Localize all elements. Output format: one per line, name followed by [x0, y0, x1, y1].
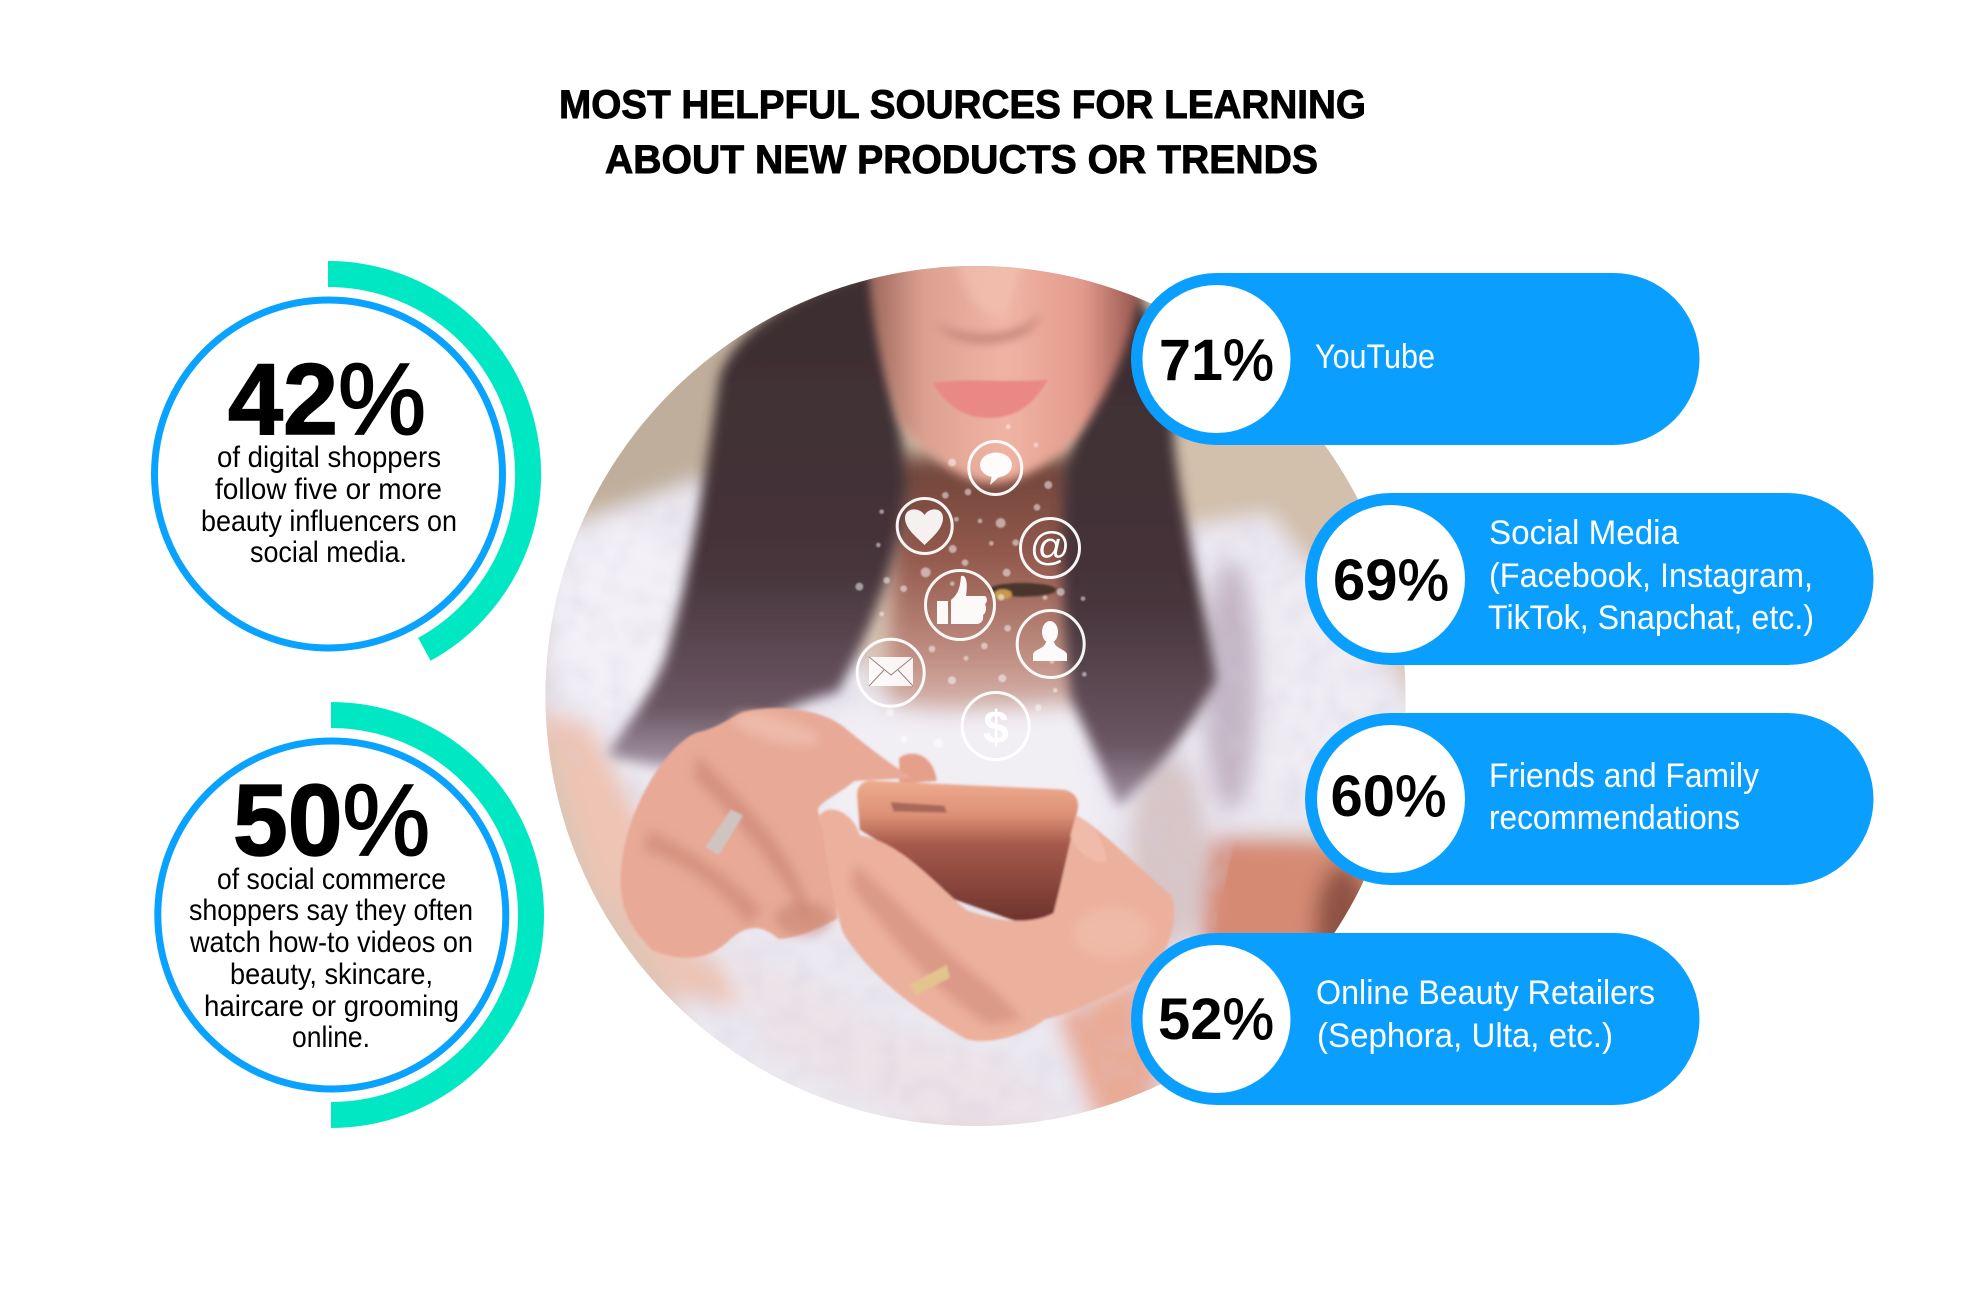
pill: Online Beauty Retailers 52%: (Sephora, Ulta, etc.) [1317, 1017, 1613, 1055]
42% description [201, 441, 457, 569]
infographic canvas [151, 90, 1874, 1128]
title: MOST HELPFUL SOURCES FOR LEARNING [559, 83, 1366, 127]
50% description [189, 863, 473, 1054]
50% description: online. [292, 1021, 370, 1054]
pill: Social Media 69%: (Facebook, Instagram, [1489, 557, 1813, 595]
stat: 42% of digital shoppers [154, 274, 528, 649]
42% description: social media. [250, 536, 407, 569]
pill: Online Beauty Retailers 52%: 52% [1158, 987, 1274, 1052]
photo: woman using smartphone [540, 250, 1438, 1140]
icon: dollar [962, 692, 1029, 760]
pill: Social Media 69%: Social Media [1489, 514, 1679, 552]
pill: Online Beauty Retailers 52%: Online Beauty Retailers [1316, 974, 1655, 1012]
icon: speech bubble [969, 442, 1022, 494]
blue ring [158, 741, 506, 1089]
50% description: watch how-to videos on [189, 926, 473, 959]
blue ring [154, 300, 502, 648]
pill: Friends and Family 60%: recommendations [1489, 799, 1740, 837]
icon: user [1017, 610, 1084, 678]
teal progress arc 50% [331, 715, 531, 1115]
50% figure: 50% [233, 765, 430, 877]
pill: Friends and Family 60%: 60% [1330, 764, 1446, 829]
pill: Social Media 69% [1305, 493, 1874, 665]
pill: Online Beauty Retailers 52% [1131, 933, 1700, 1105]
icon: thumbs up [926, 570, 994, 640]
icon: at sign: @ [1030, 525, 1070, 569]
teal progress arc 42% [328, 274, 528, 649]
42% description: of digital shoppers [217, 441, 441, 474]
50% description: of social commerce [217, 863, 446, 896]
floating sparkles [855, 424, 1087, 748]
42% description: follow five or more [215, 473, 442, 506]
50% description: haircare or grooming [204, 990, 459, 1023]
icon: heart [897, 498, 952, 554]
icon: dollar: $ [983, 701, 1009, 753]
42% figure: 42% [228, 344, 426, 456]
pill: YouTube 71%: YouTube [1315, 338, 1435, 376]
stat: 50% of social commerce shoppers [158, 715, 531, 1115]
icon: envelope [857, 639, 924, 706]
50% description: beauty, skincare, [230, 958, 433, 991]
title: ABOUT NEW PRODUCTS OR TRENDS [605, 138, 1318, 182]
pill: Social Media 69%: TikTok, Snapchat, etc.) [1488, 599, 1814, 637]
icon: at sign [1020, 518, 1080, 578]
pill: Friends and Family 60%: Friends and Family [1489, 757, 1759, 795]
50% description: shoppers say they often [189, 894, 473, 927]
pill: Social Media 69%: 69% [1333, 548, 1449, 613]
pill: Friends and Family 60% [1305, 713, 1874, 885]
42% description: beauty influencers on [201, 505, 457, 538]
title [559, 83, 1366, 182]
pill: YouTube 71%: 71% [1159, 328, 1274, 393]
pill: YouTube 71% [1131, 273, 1700, 445]
